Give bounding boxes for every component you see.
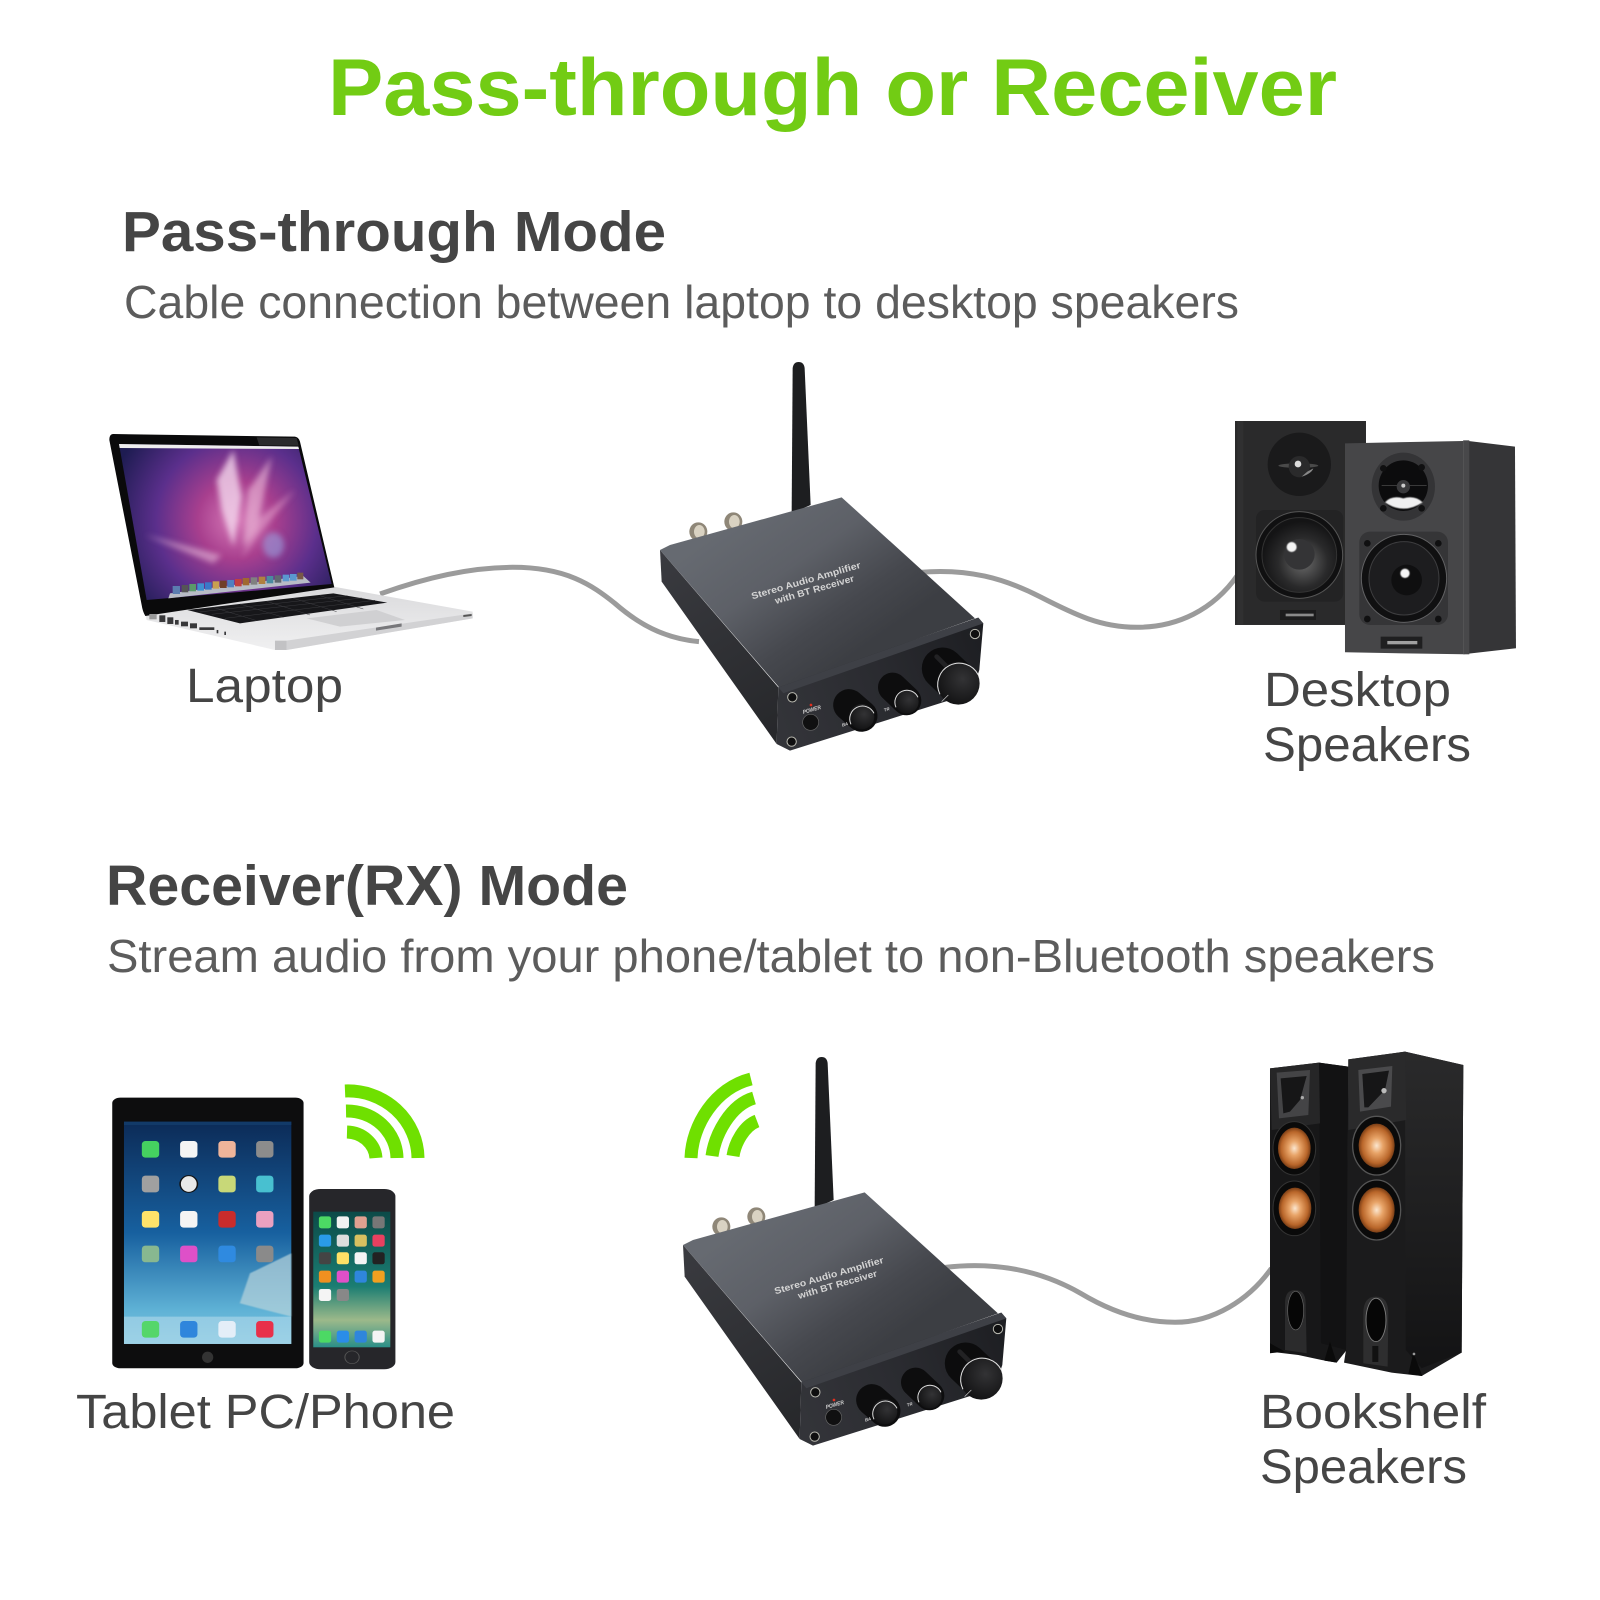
title: Pass-through or Receiver (328, 43, 1337, 133)
label: desktop speakers: Speakers (1263, 719, 1471, 772)
icon: laptop (109, 434, 473, 650)
label: bookshelf speakers: Speakers (1260, 1441, 1467, 1494)
cable: amplifier to desktop speakers (920, 571, 1238, 627)
label: bookshelf speakers: Bookshelf (1260, 1386, 1487, 1439)
heading: pass-through mode: Pass-through Mode (122, 200, 666, 264)
power and knob labels: BA (864, 1416, 872, 1423)
subheading: pass-through description: Cable connection between laptop to desktop speakers (124, 276, 1239, 328)
heading: receiver mode: Receiver(RX) Mode (106, 854, 628, 918)
icon: phone (309, 1189, 395, 1369)
amplifier top label: with BT Receiver (773, 573, 856, 606)
power and knob labels: BA (841, 721, 849, 728)
power and knob labels: POWER (825, 1400, 846, 1411)
label: desktop speakers (1263, 664, 1471, 772)
label: tablet pc / phone: Tablet PC/Phone (76, 1386, 455, 1439)
icon: tablet (112, 1098, 304, 1368)
icon: amplifier, pass-through (660, 362, 983, 751)
icon: wifi waves from phone (345, 1091, 418, 1158)
icon: desktop speakers (1235, 421, 1516, 654)
subheading: receiver description: Stream audio from your phone/tablet to non-Bluetooth speakers (107, 930, 1435, 982)
power and knob labels: TR (883, 706, 891, 713)
amplifier top label: with BT Receiver (796, 1268, 879, 1301)
icon: amplifier, receiver (683, 1057, 1006, 1446)
cable: laptop to amplifier (380, 567, 699, 642)
label: desktop speakers: Desktop (1264, 664, 1451, 717)
power and knob labels: TR (906, 1401, 914, 1408)
amplifier top label: Stereo Audio Amplifier (750, 560, 862, 601)
cable: amplifier to bookshelf speakers (945, 1266, 1271, 1322)
power and knob labels (825, 1400, 914, 1423)
icon: wifi waves from amplifier (691, 1079, 757, 1158)
label: laptop: Laptop (186, 660, 343, 713)
power and knob labels (802, 705, 891, 728)
amplifier top label: Stereo Audio Amplifier (773, 1255, 885, 1296)
icon: bookshelf speakers (1270, 1052, 1463, 1376)
label: bookshelf speakers (1260, 1386, 1487, 1494)
power and knob labels: POWER (802, 705, 823, 716)
